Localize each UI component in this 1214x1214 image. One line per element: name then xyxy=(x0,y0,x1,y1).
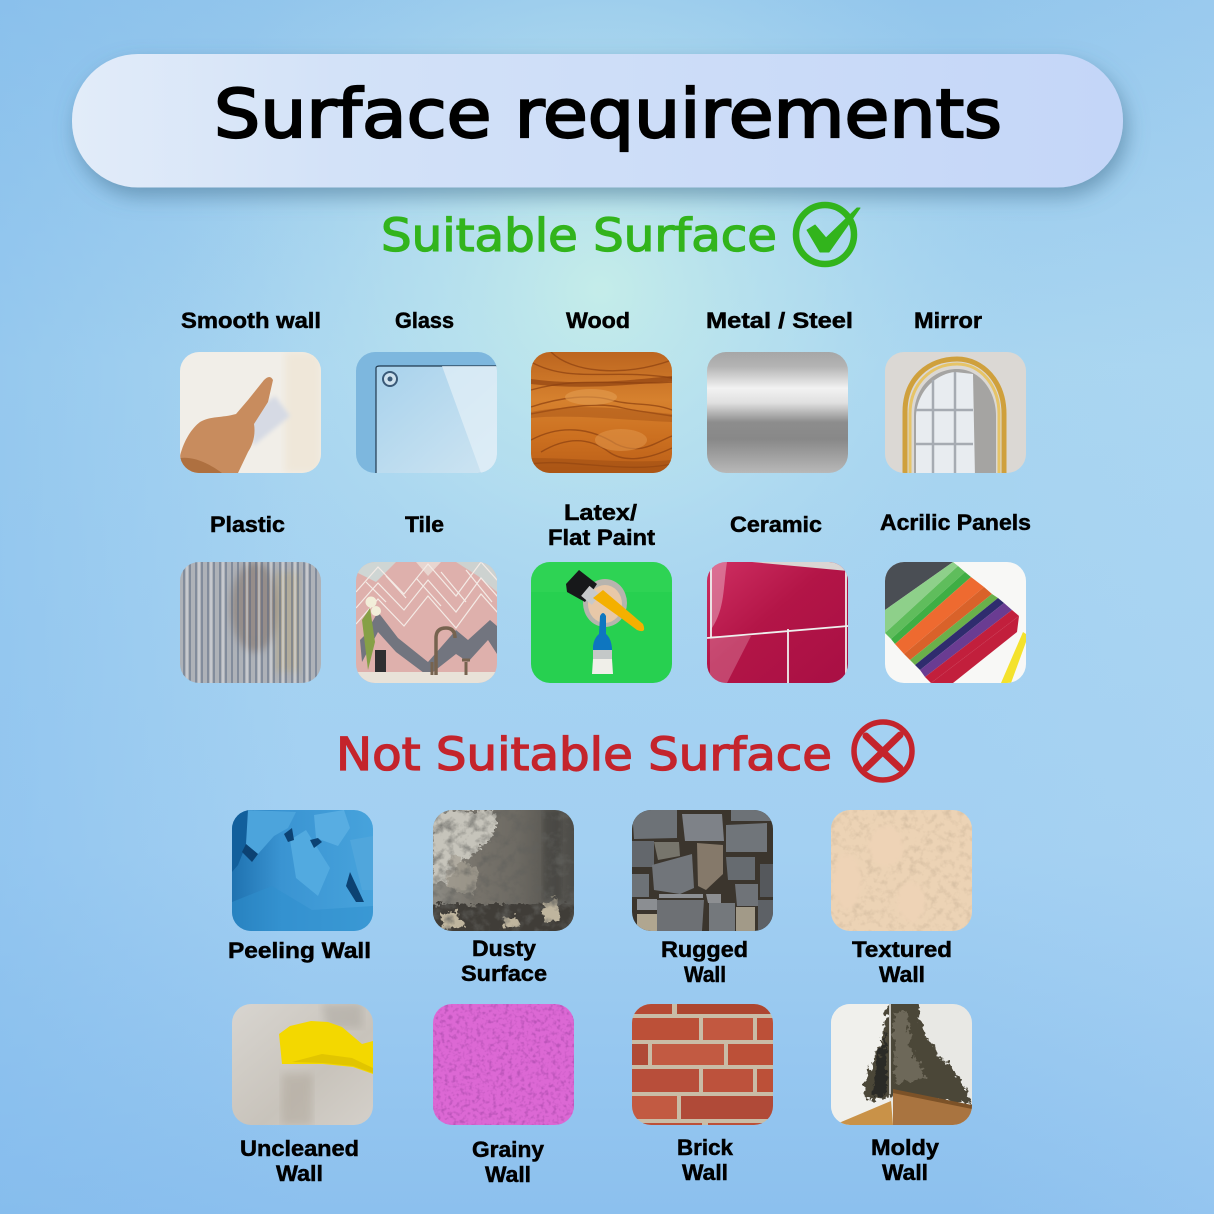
label: Moldy Wall xyxy=(871,1135,940,1185)
label: Tile: Tile xyxy=(405,512,444,537)
label: Smooth wall: Smooth wall xyxy=(181,308,321,333)
image: smooth wall xyxy=(180,352,321,473)
label: Moldy Wall: Wall xyxy=(882,1160,928,1185)
label: Rugged Wall xyxy=(661,937,748,987)
label: Uncleaned Wall: Uncleaned xyxy=(240,1136,359,1161)
label: Metal / Steel: Metal / Steel xyxy=(706,308,853,333)
image: peeling wall xyxy=(232,810,373,931)
title banner xyxy=(72,54,1123,188)
label: Grainy Wall: Wall xyxy=(485,1162,531,1187)
label: Uncleaned Wall xyxy=(240,1136,359,1186)
label: Glass: Glass xyxy=(395,308,454,333)
image: uncleaned wall xyxy=(232,1004,373,1125)
image: grainy wall xyxy=(433,1004,574,1125)
label: Textured Wall xyxy=(852,937,952,987)
image: moldy wall xyxy=(831,1000,973,1125)
heading: not suitable surface: Not Suitable Surface xyxy=(336,728,832,781)
image: rugged wall xyxy=(632,810,773,931)
image: latex paint xyxy=(531,562,672,683)
image: glass xyxy=(356,352,501,476)
label: Dusty Surface: Surface xyxy=(461,961,547,986)
heading: suitable surface xyxy=(381,205,860,264)
label: Latex / Flat Paint xyxy=(548,500,656,550)
label: Ceramic: Ceramic xyxy=(730,512,822,537)
image: tile xyxy=(356,562,506,683)
label: Latex / Flat Paint: Flat Paint xyxy=(548,525,656,550)
label: Peeling Wall: Peeling Wall xyxy=(228,938,371,963)
image: textured wall xyxy=(831,810,972,931)
icon: green check xyxy=(796,205,860,264)
image: wood xyxy=(531,352,672,473)
label: Brick Wall: Wall xyxy=(682,1160,728,1185)
label: Acrilic Panels: Acrilic Panels xyxy=(880,510,1031,535)
image: brick wall xyxy=(632,1000,773,1129)
label: Wood: Wood xyxy=(566,308,630,333)
title: Surface requirements xyxy=(214,75,1002,153)
image: plastic xyxy=(180,562,321,683)
label: Mirror: Mirror xyxy=(914,308,982,333)
label: Latex / Flat Paint: Latex/ xyxy=(564,500,637,525)
label: Textured Wall: Textured xyxy=(852,937,952,962)
image: metal xyxy=(707,352,848,473)
heading: suitable surface: Suitable Surface xyxy=(381,209,777,262)
label: Uncleaned Wall: Wall xyxy=(276,1161,323,1186)
label: Brick Wall: Brick xyxy=(677,1135,734,1160)
label: Grainy Wall: Grainy xyxy=(472,1137,545,1162)
label: Dusty Surface: Dusty xyxy=(472,936,537,961)
image: ceramic xyxy=(707,562,848,683)
label: Textured Wall: Wall xyxy=(879,962,925,987)
icon: red cross xyxy=(854,722,912,780)
label: Moldy Wall: Moldy xyxy=(871,1135,940,1160)
label: Rugged Wall: Rugged xyxy=(661,937,748,962)
image: mirror xyxy=(885,352,1026,477)
label: Brick Wall xyxy=(677,1135,734,1185)
label: Plastic: Plastic xyxy=(210,512,285,537)
label: Grainy Wall xyxy=(472,1137,545,1187)
image: acrylic panels xyxy=(885,562,1026,683)
label: Dusty Surface xyxy=(461,936,547,986)
label: Rugged Wall: Wall xyxy=(684,962,726,987)
image: dusty surface xyxy=(429,810,578,935)
